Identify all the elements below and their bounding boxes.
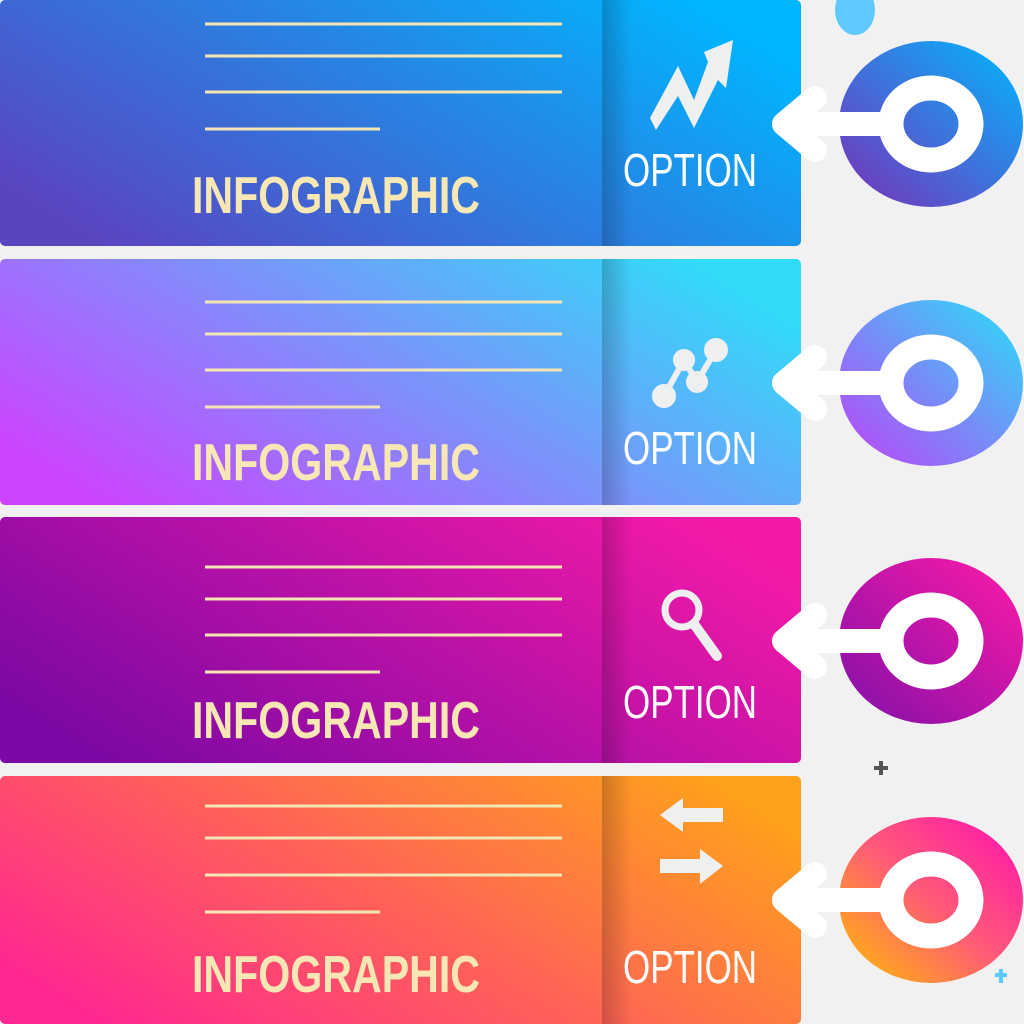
icon: magnifier xyxy=(665,593,717,656)
panel: option 3: INFOGRAPHIC xyxy=(192,692,480,750)
icon: swap arrows xyxy=(660,798,723,884)
panel: option 2: OPTION xyxy=(623,422,757,474)
panel: option 1: INFOGRAPHIC xyxy=(192,167,480,225)
panel: option 2 xyxy=(0,259,801,505)
panel: option 4: OPTION xyxy=(623,941,757,993)
marker 4: circle with arrow xyxy=(784,817,1023,983)
background decoration xyxy=(835,0,1007,983)
panel: option 1: OPTION xyxy=(623,144,757,196)
icon: trend arrow xyxy=(650,40,733,130)
panel: option 2: INFOGRAPHIC xyxy=(192,434,480,492)
marker 1: circle with arrow xyxy=(784,41,1023,207)
panel: option 4: INFOGRAPHIC xyxy=(192,946,480,1004)
panel: option 3 xyxy=(0,517,801,763)
icon: line chart xyxy=(655,341,725,405)
panel: option 1 xyxy=(0,0,801,246)
panel: option 3: OPTION xyxy=(623,676,757,728)
panel: option 4 xyxy=(0,776,801,1024)
marker 3: circle with arrow xyxy=(784,558,1023,724)
marker 2: circle with arrow xyxy=(784,300,1023,466)
